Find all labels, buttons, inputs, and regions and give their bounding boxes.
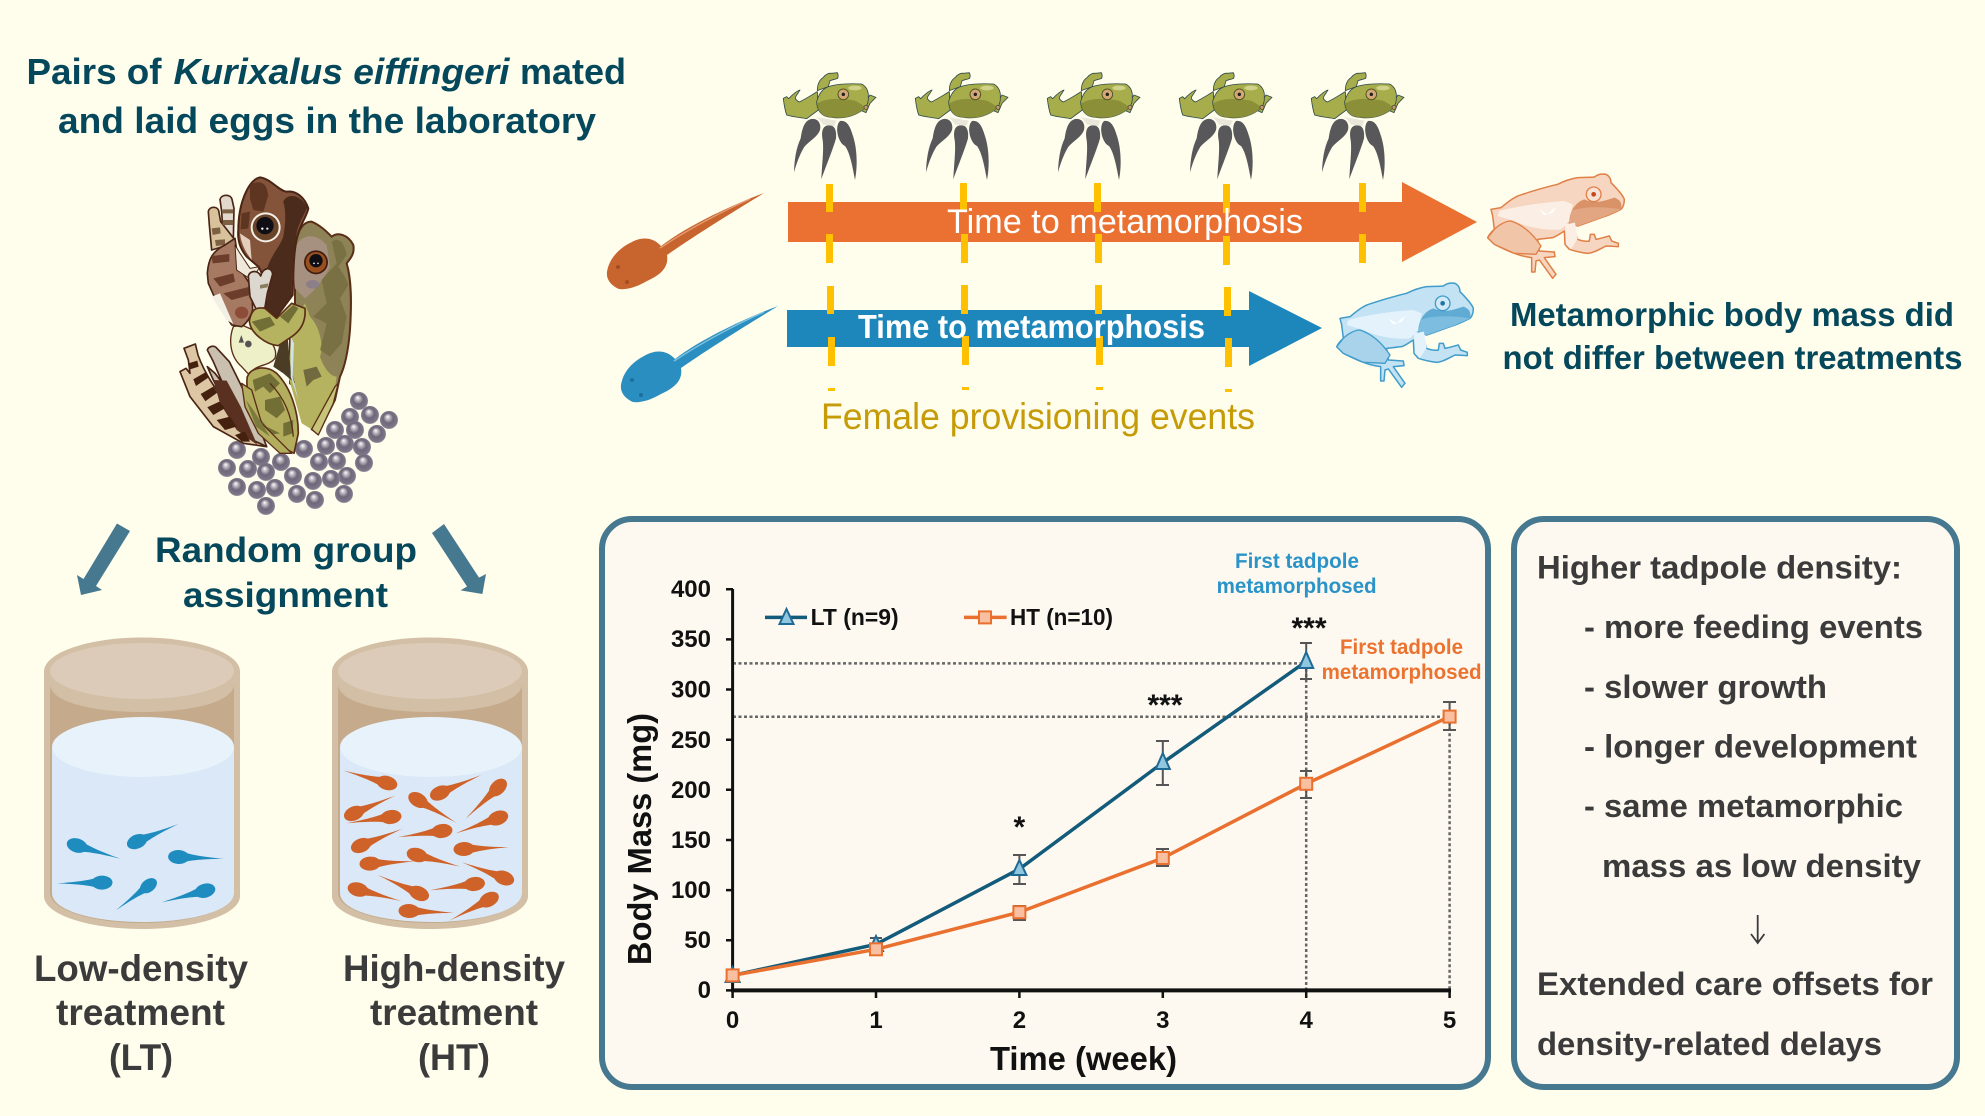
low density jar: [44, 638, 240, 929]
title: Kurixalus eiffingeri: [174, 51, 511, 92]
title: Pairs of: [26, 51, 163, 92]
summary text: [1537, 550, 1933, 1062]
low density label: Low-density: [34, 948, 248, 989]
title: [26, 51, 626, 141]
brown frog eye: [251, 212, 281, 242]
summary text: Extended care offsets for: [1537, 966, 1933, 1002]
icon: orange metamorph frog: [1488, 174, 1624, 278]
green frog belly: [288, 303, 337, 430]
low density label: [34, 948, 248, 1078]
HT annotation: metamorphosed: [1322, 661, 1482, 684]
x axis tick labels: 3: [1156, 1007, 1169, 1034]
green frog hand: [248, 269, 273, 312]
summary text: - longer development: [1584, 728, 1917, 764]
icon: down arrow: [1751, 915, 1764, 943]
icon: blue tadpole: [621, 306, 778, 402]
LT annotation: metamorphosed: [1217, 575, 1377, 598]
summary text: - same metamorphic: [1584, 788, 1903, 824]
random group assignment label: assignment: [183, 576, 388, 615]
y axis tick labels: 300: [671, 676, 711, 704]
x axis tick labels: 0: [726, 1007, 739, 1034]
green frog arm: [249, 303, 305, 346]
summary text: mass as low density: [1602, 848, 1921, 884]
orange arrow: [788, 182, 1477, 262]
HT annotation: First tadpole: [1340, 636, 1463, 659]
low density tadpoles: [57, 818, 224, 915]
y axis tick labels: 400: [671, 576, 711, 603]
panel: summary: [1514, 519, 1957, 1087]
y axis tick labels: 250: [671, 727, 711, 754]
icon: orange tadpole: [607, 193, 764, 289]
high density tadpoles: [342, 764, 516, 927]
legend: LT (n=9): [811, 604, 899, 630]
arrow label: high density time: Time to metamorphosis: [947, 203, 1303, 241]
arrow label: low density time: Time to metamorphosis: [858, 308, 1205, 345]
conclusion heading: [1502, 296, 1962, 376]
y axis tick labels: 350: [671, 626, 711, 653]
panel: growth chart: [602, 519, 1488, 1087]
icon: blue metamorph frog: [1337, 283, 1473, 387]
green frog eye: [304, 250, 328, 274]
x axis tick labels: 5: [1443, 1007, 1456, 1034]
LT series: [726, 652, 1313, 982]
green frog body: [290, 222, 354, 433]
high density label: High-density: [343, 948, 565, 989]
significance stars: *: [1014, 811, 1026, 844]
arrow: to low density: [77, 524, 130, 595]
high density label: [343, 948, 565, 1078]
x axis tick labels: 4: [1300, 1007, 1314, 1034]
female provisioning markers: [826, 183, 1366, 392]
title: and laid eggs in the laboratory: [58, 100, 596, 141]
random group assignment label: Random group: [155, 531, 417, 570]
brown frog forelimb: [207, 238, 253, 327]
random group assignment label: [155, 531, 417, 615]
summary text: - slower growth: [1584, 669, 1827, 705]
arrow: to high density: [432, 524, 486, 594]
brown frog hind leg striped: [207, 346, 267, 447]
x axis title: Time (week): [990, 1040, 1177, 1077]
conclusion heading: Metamorphic body mass did: [1510, 296, 1954, 333]
y axis tick labels: 200: [671, 777, 711, 804]
low density label: (LT): [109, 1037, 173, 1078]
x axis tick labels: 2: [1013, 1007, 1026, 1034]
y axis tick labels: 150: [671, 827, 711, 854]
green frog thigh: [247, 368, 298, 453]
y axis tick labels: [671, 576, 711, 1004]
low density label: treatment: [56, 992, 225, 1033]
legend: [765, 604, 1113, 630]
HT annotation: [1322, 636, 1482, 684]
eggs: [218, 392, 398, 515]
y axis tick labels: 0: [698, 977, 711, 1004]
brown frog head and back: [238, 177, 308, 317]
provisioning label: Female provisioning events: [821, 396, 1255, 437]
legend: HT (n=10): [1010, 604, 1113, 630]
high density jar: [332, 638, 528, 929]
LT annotation: First tadpole: [1235, 550, 1359, 573]
high density label: (HT): [418, 1037, 490, 1078]
y axis tick labels: 100: [671, 877, 711, 904]
LT annotation: [1217, 550, 1377, 598]
x axis tick labels: [726, 1007, 1456, 1034]
brown frog fingers: [220, 195, 234, 240]
error bars: [870, 643, 1456, 950]
summary text: Higher tadpole density:: [1537, 550, 1902, 586]
frogs: [180, 177, 354, 453]
HT series: [727, 711, 1456, 981]
y axis tick labels: 50: [684, 927, 711, 954]
y axis title: Body Mass (mg): [621, 713, 658, 965]
parent frogs carrying tadpoles: [783, 73, 1404, 180]
significance stars: [1014, 612, 1327, 844]
summary text: density-related delays: [1537, 1026, 1882, 1062]
title: mated: [520, 51, 626, 92]
axes: [726, 589, 1451, 998]
reference dotted lines: [733, 663, 1450, 990]
high density label: treatment: [370, 992, 538, 1033]
icon: mating frogs with eggs: [180, 177, 398, 515]
blue arrow: [787, 291, 1322, 366]
significance stars: ***: [1291, 612, 1327, 645]
conclusion heading: not differ between treatments: [1502, 339, 1962, 376]
summary text: - more feeding events: [1584, 609, 1923, 645]
x axis tick labels: 1: [869, 1007, 883, 1034]
significance stars: ***: [1147, 689, 1183, 722]
brown frog white belly: [231, 325, 276, 374]
